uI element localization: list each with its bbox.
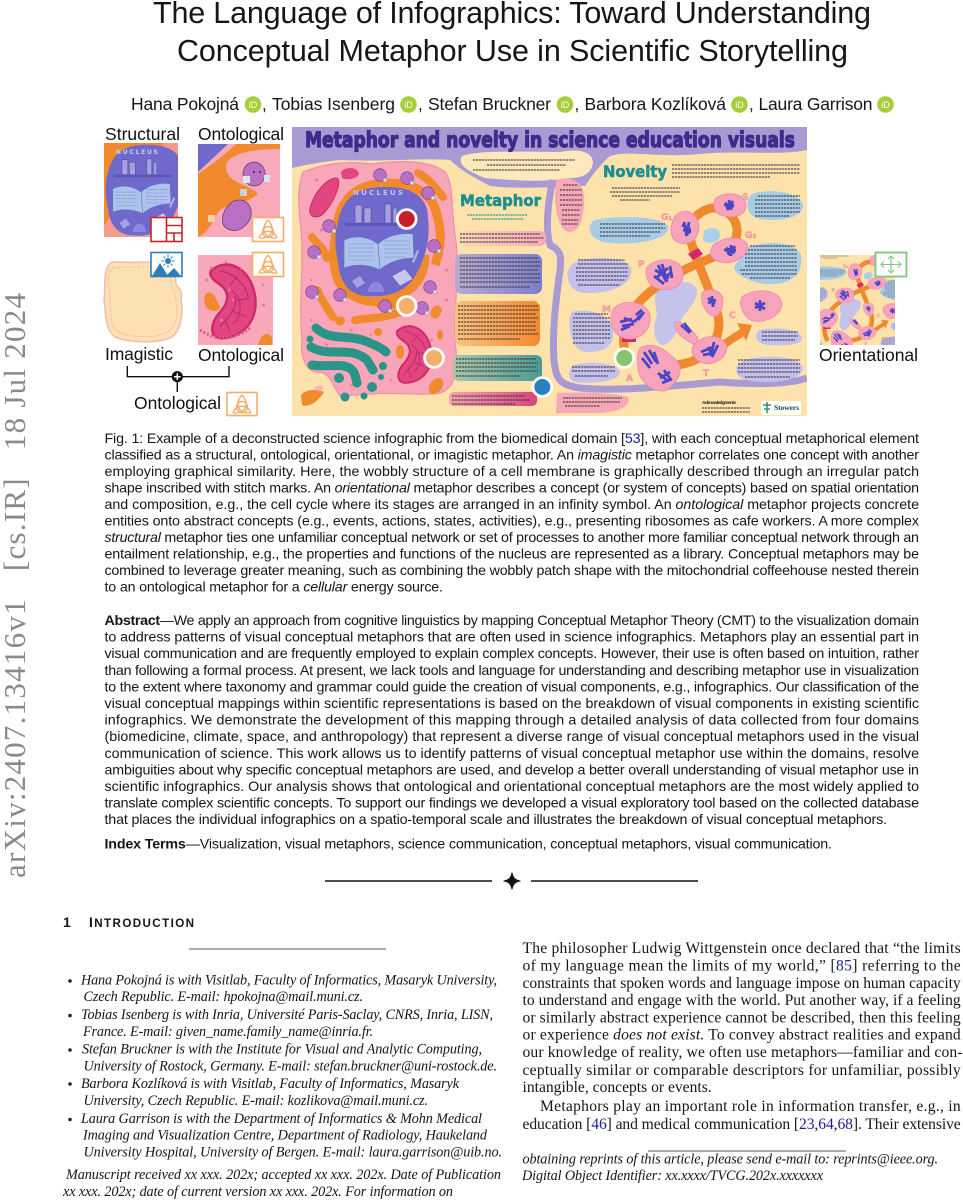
manuscript note: [62, 1167, 501, 1200]
label: Ontological top: Ontological: [198, 124, 284, 144]
label: Imagistic: Imagistic: [105, 344, 173, 364]
figure caption: Fig. 1: Example of a deconstructed science infographic from the biomedical domain [53], with each conceptual metaphorical element: [104, 431, 919, 447]
authors: ,: [418, 95, 423, 114]
label: Ontological lower: Ontological: [198, 345, 284, 365]
figure caption: and composition, e.g., the cell cycle where its stages are arranged in an infinity symbol. An ontological metaphor projects concrete: [104, 497, 919, 513]
metaphor badges: [397, 210, 416, 228]
crop: nucleus library: [104, 143, 178, 237]
author affiliations: France. E-mail: given_name.family_name@inria.fr.: [82, 1024, 373, 1040]
authors: [131, 94, 894, 114]
abstract: (biomedicine, climate, space, and anthropology) that represent a diverse range of visual conceptual metaphors used in the visual: [104, 729, 919, 745]
authors: iD: [404, 100, 413, 110]
introduction body text: The philosopher Ludwig Wittgenstein once declared that “the limits: [522, 940, 961, 957]
abstract: translate complex scientific concepts. To support our findings we developed a visual exploratory tool based on the collected database: [104, 796, 919, 812]
infographic: Metaphor and novelty poster: [292, 127, 807, 416]
figure caption: [104, 431, 919, 596]
manuscript note: Manuscript received xx xxx. 202x; accepted xx xxx. 202x. Date of Publication: [65, 1167, 501, 1183]
abstract: visual conceptual mappings within scientific representations is based on the breakdown of visual components in existing scientific: [104, 696, 919, 712]
introduction body text: intangible, concepts or events.: [522, 1079, 712, 1096]
label: Orientational: Orientational: [819, 345, 918, 365]
title: [153, 0, 871, 68]
authors: ,: [574, 95, 579, 114]
authors: Barbora Kozlíková: [584, 94, 726, 114]
authors: Laura Garrison: [758, 94, 872, 114]
icon: imagistic: [151, 252, 182, 276]
figure caption: shape inscribed with stitch marks. An orientational metaphor describes a concept (or system of concepts) based on spatial orientation: [104, 480, 919, 496]
icon: orientational: [876, 252, 906, 276]
divider with diamond: [325, 872, 698, 890]
figure caption: classified as a structural, ontological, orientational, or imagistic metaphor. An imagistic metaphor correlates one concept with another: [104, 448, 919, 464]
crop: mitochondrial coffeehouse: [198, 255, 273, 345]
authors: ,: [749, 95, 754, 114]
crop: orientational cell cycle: [820, 255, 895, 345]
figure caption: structural metaphor ties one unfamiliar conceptual network or set of processes to another more familiar conceptual network through an: [104, 530, 919, 546]
label: Ontological combined: Ontological: [134, 393, 221, 413]
icon: ontological: [252, 218, 284, 242]
abstract: ambiguities about why specific conceptual metaphors are used, and develop a better overall understanding of visual metaphor use in: [104, 762, 919, 778]
headings: Metaphor: [460, 191, 541, 210]
author affiliations: Tobias Isenberg is with Inria, Université Paris-Saclay, CNRS, Inria, LISN,: [81, 1007, 493, 1023]
footnote: obtaining reprints of this article, please send e-mail to: reprints@ieee.org.: [522, 1152, 938, 1168]
title: Conceptual Metaphor Use in Scientific Storytelling: [177, 34, 848, 68]
rough ER: [334, 183, 440, 301]
introduction body text: or similarly abstract experience cannot be described, then this feeling: [522, 1010, 961, 1026]
author affiliations: Laura Garrison is with the Department of Informatics & Mohn Medical: [80, 1111, 482, 1127]
authors: ,: [262, 95, 267, 114]
abstract: than following a formal process. At present, we lack tools and language for understanding and describing metaphor use in visualization: [104, 663, 919, 679]
crop: nucleus library: NUCLEUS: [116, 149, 158, 156]
abstract: communication of science. This work allows us to identify patterns of visual conceptual metaphor use within the domains, resolve: [104, 746, 919, 762]
ribosomes: [374, 169, 387, 182]
figure caption: to an ontological metaphor for a cellular energy source.: [104, 580, 443, 596]
connector plus: [127, 366, 229, 392]
header band: [292, 127, 807, 188]
abstract: to address patterns of visual conceptual metaphors that are often used in science infographics. Metaphors play an essential part in: [104, 630, 919, 646]
introduction body text: of my language mean the limits of my world,” [85] referring to the: [522, 957, 961, 974]
abstract: infographics. We demonstrate the development of this mapping through a detailed analysis of data collected from four domains: [104, 713, 919, 729]
authors: iD: [561, 100, 570, 110]
infographic: Metaphor and novelty poster: Stowers: [774, 403, 799, 412]
section heading: INTRODUCTION: [89, 914, 194, 930]
introduction body text: [522, 940, 962, 1133]
manuscript note: xx xxx. 202x; date of current version xx xxx. 202x. For information on: [62, 1184, 453, 1200]
crop: ribosome cafe workers: [198, 144, 280, 237]
figure caption: entailment relationship, e.g., the properties and functions of the nucleus are represented as a library. Conceptual metaphors may be: [104, 546, 919, 562]
introduction body text: our knowledge of reality, we often use metaphors—familiar and con-: [522, 1044, 962, 1061]
footnote: Digital Object Identifier: xx.xxxx/TVCG.202x.xxxxxxx: [521, 1168, 824, 1184]
golgi: [311, 328, 386, 383]
introduction body text: ceptually similar or comparable descriptors for unfamiliar, possibly: [522, 1062, 961, 1079]
metaphor column blocks: [458, 231, 546, 246]
abstract: that places the individual infographics on a spatio-temporal scale and illustrates the breakdown of visual conceptual metaphors.: [104, 812, 887, 828]
orange vesicles: [301, 303, 446, 406]
logo: [761, 401, 801, 415]
abstract: Abstract—We apply an approach from cognitive linguistics by mapping Conceptual Metaphor Theory (CMT) to the visualization domain: [104, 613, 919, 629]
abstract: [104, 613, 919, 828]
infographic: Metaphor and novelty poster: Novelty: [603, 162, 668, 181]
index terms: Index Terms—Visualization, visual metaphors, science communication, conceptual metaphors, visual communication.: [104, 836, 832, 852]
icon: ontological second: [252, 252, 284, 276]
author affiliations: Czech Republic. E-mail: hpokojna@mail.muni.cz.: [84, 989, 363, 1005]
introduction body text: constraints that spoken words and language impose on human capacity: [522, 975, 961, 992]
introduction body text: to understand and engage with the world. Put another way, if a feeling: [522, 992, 961, 1009]
infographic: Metaphor and novelty poster: NUCLEUS: [353, 189, 403, 197]
introduction body text: education [46] and medical communication [23,64,68]. Their extensive: [522, 1116, 961, 1133]
abstract: visual communication and are frequently employed to explain complex concepts. However, their use is often based on intuition, rather: [104, 646, 919, 662]
author affiliations: Stefan Bruckner is with the Institute for Visual and Analytic Computing,: [82, 1042, 482, 1058]
footnote: [521, 1151, 938, 1184]
cell: [299, 162, 457, 396]
authors: iD: [735, 100, 744, 110]
authors: iD: [881, 100, 890, 110]
author affiliations: University of Rostock, Germany. E-mail: stefan.bruckner@uni-rostock.de.: [84, 1058, 497, 1074]
author affiliations: University Hospital, University of Bergen. E-mail: laura.garrison@uib.no.: [84, 1144, 502, 1160]
panel: deconstructed labels and crops: [104, 124, 284, 416]
authors: Hana Pokojná: [131, 94, 239, 114]
icon: ontological combined: [227, 392, 257, 416]
figure caption: entities onto abstract concepts (e.g., events, actions, states, activities), e.g., presenting ribosomes as cafe workers. A more complex: [104, 514, 919, 530]
nucleus: [335, 187, 429, 296]
author affiliations: Imaging and Visualization Centre, Department of Radiology, Haukeland: [82, 1128, 488, 1144]
figure caption: employing graphical similarity. Here, the wobbly structure of a cell membrane is graphically described through an irregular patch: [104, 464, 919, 480]
introduction body text: or experience does not exist. To convey abstract realities and expand: [522, 1026, 961, 1044]
introduction body text: Metaphors play an important role in information transfer, e.g., in: [540, 1098, 961, 1115]
figure caption: combined to leverage greater meaning, such as combining the wobbly patch shape with the mitochondrial coffeehouse nested therein: [104, 563, 919, 579]
author affiliations: Barbora Kozlíková is with Visitlab, Faculty of Informatics, Masaryk: [81, 1076, 460, 1092]
author affiliations: University, Czech Republic. E-mail: kozlikova@mail.muni.cz.: [84, 1093, 428, 1109]
author affiliations: [68, 949, 502, 1160]
abstract: to the extent where taxonomy and grammar could guide the creation of visual components, e.g., infographics. Our classification of the: [104, 679, 919, 695]
label: Structural: Structural: [105, 124, 180, 144]
imagistic patch: [104, 262, 182, 342]
authors: Stefan Bruckner: [428, 94, 551, 114]
section heading: 1: [63, 914, 71, 930]
micro text texture: [452, 160, 800, 412]
infographic: Metaphor and novelty poster: Acknowledgments: [702, 400, 736, 405]
authors: Tobias Isenberg: [272, 94, 395, 114]
icon: structural: [151, 218, 182, 242]
cell cycle: [567, 188, 803, 391]
abstract: scientific infographics. Our analysis shows that ontological and orientational conceptual metaphors are the most widely applied to: [104, 779, 919, 795]
authors: iD: [249, 100, 258, 110]
author affiliations: Hana Pokojná is with Visitlab, Faculty of Informatics, Masaryk University,: [80, 972, 497, 988]
mitochondria: [397, 326, 432, 383]
